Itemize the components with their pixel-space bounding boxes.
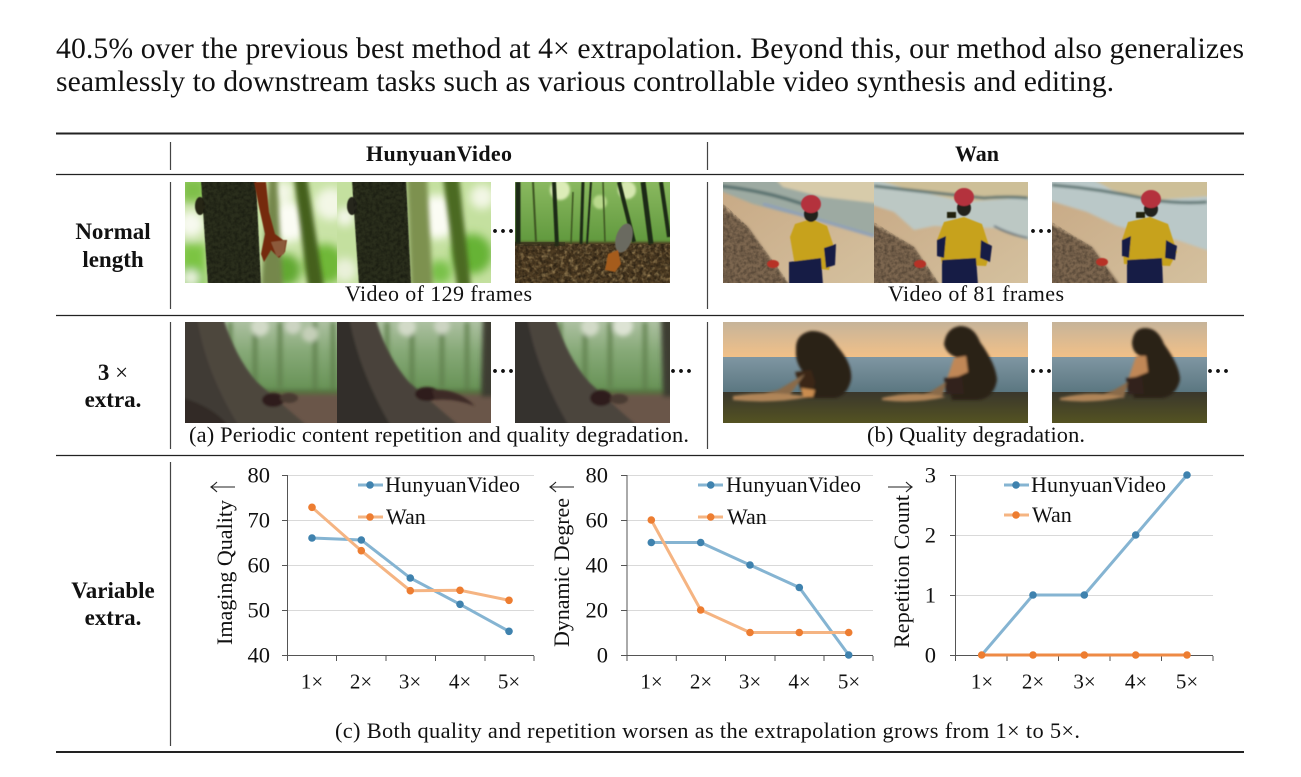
video frame: misty forest squirrel 3 [515, 322, 670, 423]
line chart: Repetition Count [888, 462, 1213, 694]
video frame: monkey at sunset 3 [1052, 322, 1207, 423]
ellipsis: ... [670, 353, 694, 379]
ellipsis: ... [492, 353, 516, 379]
line chart: Repetition Count: 1 [925, 582, 936, 608]
line chart: Imaging Quality: 70 [248, 508, 270, 532]
row label: Variable extra: Variable [71, 578, 155, 603]
line chart: Imaging Quality: Imaging Quality [212, 500, 237, 645]
line chart: Repetition Count: 3× [1073, 670, 1096, 694]
row label: Variable extra [71, 578, 155, 630]
caption (a): (a) Periodic content repetition and quality degradation. [189, 422, 689, 447]
line chart: Imaging Quality: 50 [248, 598, 270, 622]
line chart: Imaging Quality: 5× [498, 670, 520, 694]
line chart: Dynamic Degree: 0 [597, 642, 608, 668]
line chart: Repetition Count: 2 [925, 522, 936, 548]
line chart: Repetition Count: Repetition Count [889, 495, 914, 648]
line chart: Imaging Quality: Wan [386, 504, 426, 529]
video frame: squirrel on trunk 1 [185, 182, 337, 283]
column heading: Wan: Wan [955, 141, 999, 166]
line chart: Repetition Count: 0 [925, 642, 936, 668]
line chart: Dynamic Degree [549, 462, 873, 694]
line chart: Imaging Quality: 2× [350, 670, 372, 694]
video frame: squirrel on trunk 2 [337, 182, 491, 283]
ellipsis: ... [492, 213, 516, 239]
line chart: Repetition Count: 5× [1176, 670, 1198, 694]
line chart: Dynamic Degree: 20 [586, 598, 608, 622]
ellipsis: ... [1207, 353, 1231, 379]
row label: 3x extra [85, 360, 141, 412]
ellipsis: ... [1030, 353, 1054, 379]
video frame: misty forest squirrel 1 [185, 322, 337, 423]
line chart: Dynamic Degree: 2× [690, 670, 712, 694]
caption (c): (c) Both quality and repetition worsen as the extrapolation grows from 1× to 5×. [335, 718, 1080, 743]
line chart: Imaging Quality: 40 [248, 642, 270, 668]
line chart: Imaging Quality: 4× [449, 670, 471, 694]
row label: 3x extra: 3 × [98, 360, 128, 385]
intro paragraph: seamlessly to downstream tasks such as various controllable video synthesis and editing. [56, 66, 1114, 98]
line chart: Repetition Count: 3 [925, 462, 936, 488]
line chart: Imaging Quality [211, 462, 534, 694]
caption: Video of 81 frames: Video of 81 frames [888, 281, 1064, 306]
video frame: beach person 1 [723, 182, 874, 283]
line chart: Dynamic Degree: HunyuanVideo [726, 472, 861, 497]
line chart: Imaging Quality: 3× [399, 670, 421, 694]
video frame: monkey at sunset 2 [874, 322, 1028, 423]
line chart: Imaging Quality: 80 [248, 462, 270, 488]
line chart: Repetition Count: 1× [971, 670, 993, 694]
row label: Variable extra: extra. [85, 605, 141, 630]
video frame: monkey at sunset 1 [723, 322, 874, 423]
line chart: Imaging Quality: HunyuanVideo [385, 472, 520, 497]
ellipsis: ... [1030, 213, 1054, 239]
line chart: Dynamic Degree: 1× [640, 670, 663, 694]
line chart: Dynamic Degree: 80 [586, 462, 608, 488]
line chart: Repetition Count: 2× [1022, 670, 1044, 694]
line chart: Dynamic Degree: 5× [838, 670, 860, 694]
line chart: Repetition Count: Wan [1032, 502, 1072, 527]
line chart: Repetition Count: 4× [1125, 670, 1147, 694]
intro paragraph: 40.5% over the previous best method at 4× extrapolation. Beyond this, our method also generalizes [56, 33, 1244, 65]
line chart: Dynamic Degree: Wan [727, 504, 767, 529]
line chart: Dynamic Degree: 3× [739, 670, 761, 694]
column heading: HunyuanVideo: HunyuanVideo [366, 141, 512, 166]
line chart: Imaging Quality: 60 [248, 552, 270, 578]
row label: 3x extra: extra. [85, 387, 141, 412]
row label: Normal length: length [82, 247, 144, 272]
table rules [56, 134, 1244, 752]
line chart: Dynamic Degree: Dynamic Degree [549, 498, 574, 647]
line chart: Dynamic Degree: 40 [586, 552, 608, 578]
row label: Normal length [75, 219, 151, 272]
line chart: Repetition Count: HunyuanVideo [1031, 472, 1166, 497]
line chart: Imaging Quality: 1× [301, 670, 323, 694]
video frame: misty forest squirrel 2 [337, 322, 491, 423]
video frame: beach person 3 [1052, 182, 1207, 283]
line chart: Dynamic Degree: 4× [788, 670, 811, 694]
row label: Normal length: Normal [75, 219, 151, 244]
caption: Video of 129 frames: Video of 129 frames [345, 281, 532, 306]
video frame: beach person 2 [874, 182, 1028, 283]
intro paragraph [56, 33, 1244, 98]
line chart: Dynamic Degree: 60 [586, 508, 608, 532]
video frame: forest floor squirrel [515, 182, 670, 283]
caption (b): (b) Quality degradation. [867, 422, 1085, 447]
